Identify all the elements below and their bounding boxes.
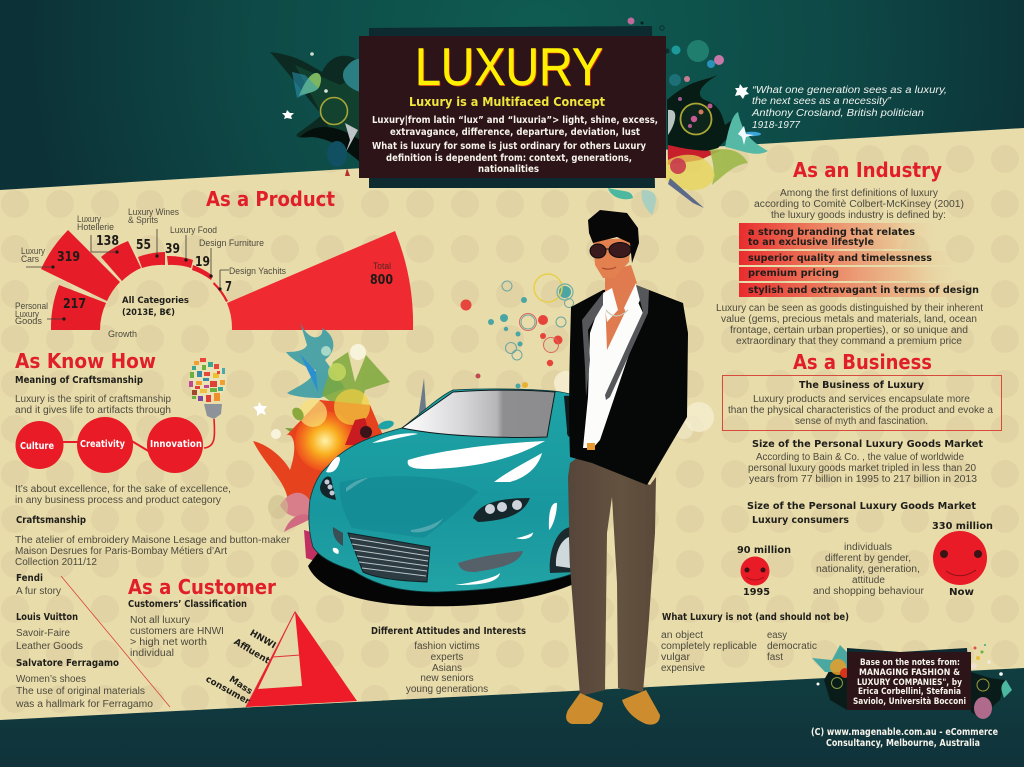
man lapels <box>582 285 649 400</box>
text: excellence <box>15 484 231 506</box>
circle: innovation: Innovation <box>150 439 202 450</box>
car right headlight <box>473 498 530 522</box>
panel: the business of luxury: Luxury products and services encapsulate more <box>753 394 970 405</box>
text: luxury consumers heading: Size of the Personal Luxury Goods Market <box>747 501 976 512</box>
leader lines <box>26 229 229 319</box>
industry description: extraordinary that they command a premium price <box>736 336 962 347</box>
chart values: 55 <box>136 238 151 253</box>
examples: fendi, vuitton, ferragamo: Fendi <box>16 573 43 584</box>
car lower intake <box>458 551 523 572</box>
examples: fendi, vuitton, ferragamo: Salvatore Ferragamo <box>16 658 119 669</box>
text: excellence: in any business process and product category <box>15 495 221 506</box>
subtitle: Luxury is a Multifaced Concept <box>409 95 605 109</box>
header description: extravagance, difference, departure, deviation, lust <box>390 127 640 138</box>
header description: Luxury|from latin “lux” and “luxuria”> light, shine, excess, <box>372 115 658 126</box>
chart labels: Luxury Food <box>170 225 217 235</box>
text: size of market: Size of the Personal Luxury Goods Market <box>752 439 983 450</box>
chart labels: Luxury <box>77 214 101 224</box>
text: different attitudes: new seniors <box>420 673 474 684</box>
car shading <box>340 476 478 538</box>
car left headlight <box>320 476 336 500</box>
industry bars <box>739 223 984 297</box>
text: excellence: It’s about excellence, for the sake of excellence, <box>15 484 231 495</box>
text: different attitudes <box>371 626 526 695</box>
wedge: wines and spirits <box>138 252 165 268</box>
smiley: 1995: 1995 <box>743 587 770 598</box>
industry description: value (gems, precious metals and materials, land, ocean <box>721 314 977 325</box>
man shoes <box>566 690 660 725</box>
circle: innovation <box>147 417 203 473</box>
chart labels: Personal <box>15 301 48 311</box>
know how intro <box>15 394 171 416</box>
decoration: burst right of header <box>608 18 768 215</box>
man hair <box>588 210 639 263</box>
know how intro: and it gives life to artifacts through <box>15 405 171 416</box>
text: individuals: and shopping behaviour <box>813 586 925 597</box>
car grille <box>348 533 430 582</box>
circle: creativity: Creativity <box>80 439 125 450</box>
wedge: total <box>227 231 413 330</box>
text: different attitudes: Asians <box>432 663 462 674</box>
man sunglasses <box>590 242 634 258</box>
subheading: meaning of craftsmanship: Meaning of Craftsmanship <box>15 375 143 386</box>
chart labels <box>15 207 391 339</box>
man belt <box>587 443 595 450</box>
car wheel <box>550 527 578 573</box>
decoration: burst around source box <box>812 644 1012 719</box>
panel: source note: Erica Corbellini, Stefania <box>858 687 961 697</box>
subheading: craftsmanship: Craftsmanship <box>16 515 86 526</box>
decoration: colorful flowers behind car <box>253 322 427 562</box>
wedge: luxury cars <box>41 230 120 301</box>
pyramid: customer classification: HNWI <box>248 628 277 651</box>
chart labels: Luxury <box>21 246 45 256</box>
examples: fendi, vuitton, ferragamo: Women’s shoes <box>16 674 86 685</box>
chart labels: Hotellerie <box>77 222 114 232</box>
man necklace <box>606 310 628 316</box>
text: different attitudes: experts <box>431 652 463 663</box>
examples: fendi, vuitton, ferragamo <box>15 573 153 710</box>
text: different attitudes: young generations <box>406 684 488 695</box>
heading: as an industry: As an Industry <box>793 158 942 182</box>
decoration: burst left of header <box>270 52 362 176</box>
connector lines between circles <box>60 440 150 452</box>
pyramid: customer classification <box>204 611 357 707</box>
panel: source note: Saviolo, Università Bocconi <box>853 697 966 707</box>
chart labels: Total <box>373 261 391 271</box>
quote: 1918-1977 <box>752 120 800 131</box>
text: individuals <box>813 542 925 597</box>
text: individuals: attitude <box>852 575 885 586</box>
quote: “What one generation sees as a luxury, <box>752 85 947 96</box>
text: what luxury is not: easy <box>767 630 787 641</box>
text: luxury consumers heading <box>747 501 976 526</box>
smiley: 1995 <box>737 545 791 598</box>
title: LUXURY <box>415 38 603 97</box>
heading: as a business: As a Business <box>793 350 932 374</box>
quote <box>751 85 947 131</box>
examples: fendi, vuitton, ferragamo: Savoir-Faire <box>16 628 70 639</box>
industry intro: Among the first definitions of luxury <box>780 188 938 199</box>
smiley: now: Now <box>949 587 974 598</box>
chart values: 319 <box>57 250 80 265</box>
examples: fendi, vuitton, ferragamo: was a hallmark for Ferragamo <box>15 699 153 710</box>
chart labels: Luxury <box>15 309 39 319</box>
quote: the next sees as a necessity” <box>752 96 892 107</box>
chart labels: Design Furniture <box>199 238 264 248</box>
man neck and chest <box>605 265 637 350</box>
industry bars: premium pricing <box>748 268 839 279</box>
know how intro: Luxury is the spirit of craftsmanship <box>15 394 171 405</box>
illustration: man in black jacket <box>566 210 688 725</box>
header description: What is luxury for some is just ordinary for others Luxury <box>372 141 646 152</box>
chart labels: & Sprits <box>128 215 158 225</box>
circle: culture <box>16 421 64 469</box>
examples: fendi, vuitton, ferragamo: A fur story <box>16 586 61 597</box>
text: HNWI note: individual <box>130 648 174 659</box>
car highlights <box>326 433 557 585</box>
panel: source note: MANAGING FASHION & <box>859 668 960 678</box>
text: HNWI note <box>130 615 224 659</box>
chart: luxury categories semicircle <box>15 207 413 339</box>
text: atelier: The atelier of embroidery Maisone Lesage and button-maker <box>15 535 291 546</box>
industry description <box>716 303 983 347</box>
text: size of market: According to Bain & Co. , the value of worldwide <box>756 452 964 463</box>
industry description: frontage, certain urban properties), or so unique and <box>730 325 968 336</box>
text: HNWI note: > high net worth <box>130 637 207 648</box>
text: what luxury is not: expensive <box>661 663 705 674</box>
chart values: 800 <box>370 273 393 288</box>
chart values: 138 <box>96 234 119 249</box>
text: HNWI note: customers are HNWI <box>130 626 224 637</box>
industry description: Luxury can be seen as goods distinguished by their inherent <box>716 303 983 314</box>
industry intro: the luxury goods industry is defined by: <box>771 210 946 221</box>
header description <box>372 115 658 175</box>
circle: creativity <box>77 417 133 473</box>
wedge: luxury food <box>167 256 193 268</box>
chart values: 19 <box>195 255 210 270</box>
text: different attitudes: fashion victims <box>414 641 480 652</box>
decoration: bubbles and rings <box>460 274 714 439</box>
industry bars: a strong branding that relates <box>748 227 915 238</box>
text: individuals: individuals <box>844 542 892 553</box>
text: luxury consumers heading: Luxury consumers <box>752 515 849 526</box>
pyramid: customer classification: Mass <box>227 675 254 697</box>
man pants <box>568 452 656 696</box>
chart labels: (2013E, B€) <box>122 308 175 318</box>
wedge: personal luxury goods <box>51 285 106 330</box>
text: what luxury is not: democratic <box>767 641 817 652</box>
chart values: 39 <box>165 242 180 257</box>
background: dark teal top band <box>0 0 1024 210</box>
wedge: design yachts <box>213 282 228 302</box>
chart labels: Goods <box>15 316 42 326</box>
text: what luxury is not: vulgar <box>661 652 691 663</box>
leader dots <box>51 250 222 321</box>
chart labels: Growth <box>108 329 137 339</box>
illustration: sports car <box>308 389 580 606</box>
man jacket <box>569 285 688 485</box>
icon: light bulb with wire <box>189 358 227 448</box>
text: what luxury is not: an object <box>661 630 703 641</box>
panel: source note: LUXURY COMPANIES", by <box>857 678 962 688</box>
subheading: customers classification: Customers’ Classification <box>128 599 247 610</box>
panel: source note: Base on the notes from: <box>860 658 960 668</box>
quote: Anthony Crosland, British politician <box>751 108 924 119</box>
industry bars: superior quality and timelessness <box>748 253 932 264</box>
industry bars: stylish and extravagant in terms of design <box>748 285 979 296</box>
chart values <box>57 234 393 312</box>
industry intro <box>754 188 964 221</box>
examples: fendi, vuitton, ferragamo: Louis Vuitton <box>16 612 78 623</box>
header description: definition is dependent from: context, generations, <box>386 153 632 164</box>
panel: the business of luxury: sense of myth and fascination. <box>795 416 928 427</box>
industry bars: to an exclusive lifestyle <box>748 237 874 248</box>
man face <box>593 238 631 278</box>
credit <box>811 727 998 749</box>
text: size of market: years from 77 billion in 1995 to 217 billion in 2013 <box>749 474 977 485</box>
man shirt <box>583 283 643 448</box>
chart labels: Cars <box>21 254 39 264</box>
panel: the business of luxury: The Business of Luxury <box>799 380 924 391</box>
industry intro: according to Comitè Colbert-McKinsey (2001) <box>754 199 964 210</box>
panel: the business of luxury <box>722 376 1002 430</box>
title: LUXURY <box>416 39 604 98</box>
background: beige dotted central band <box>0 128 1024 720</box>
man collar <box>603 283 640 322</box>
smiley: now <box>932 521 993 598</box>
text: HNWI note: Not all luxury <box>130 615 190 626</box>
text: what luxury is not <box>661 612 849 674</box>
text: atelier: Maison Desrues for Paris-Bombay Métiers d’Art <box>15 546 227 557</box>
panel: source note <box>847 648 971 710</box>
wedge: luxury hotellerie <box>101 241 141 281</box>
chart labels: All Categories <box>122 296 189 306</box>
text: size of market: personal luxury goods market tripled in less than 20 <box>748 463 976 474</box>
circle: culture: Culture <box>20 441 54 452</box>
text: what luxury is not: completely replicable <box>661 641 757 652</box>
credit: Consultancy, Melbourne, Australia <box>826 738 980 749</box>
text: size of market <box>748 439 983 485</box>
text: what luxury is not: fast <box>767 652 783 663</box>
pyramid: customer classification: Affluent <box>232 637 272 667</box>
smiley: now: 330 million <box>932 521 993 532</box>
heading: as know how: As Know How <box>15 349 156 373</box>
car windshield <box>402 390 555 437</box>
text: different attitudes: Different Attitudes and Interests <box>371 626 526 637</box>
wedge: design furniture <box>192 265 213 280</box>
text: atelier: Collection 2011/12 <box>15 557 97 568</box>
text: atelier <box>15 535 291 568</box>
pyramid: customer classification: consumer <box>204 675 252 707</box>
chart values: 217 <box>63 297 86 312</box>
heading: as a product: As a Product <box>206 187 335 211</box>
chart labels: Design Yachits <box>229 266 286 276</box>
text: individuals: nationality, generation, <box>816 564 920 575</box>
chart values: 7 <box>225 280 232 295</box>
background: dark teal bottom band <box>0 660 1024 767</box>
text: what luxury is not: What Luxury is not (and should not be) <box>662 612 849 623</box>
header panel <box>359 26 666 188</box>
examples: fendi, vuitton, ferragamo: The use of original materials <box>16 686 145 697</box>
header description: nationalities <box>478 164 539 175</box>
text: individuals: different by gender, <box>825 553 911 564</box>
chart labels: Luxury Wines <box>128 207 179 217</box>
smiley: 1995: 90 million <box>737 545 791 556</box>
panel: the business of luxury: than the physical characteristics of the product and evoke a <box>728 405 993 416</box>
heading: as a customer: As a Customer <box>128 575 276 599</box>
examples: fendi, vuitton, ferragamo: Leather Goods <box>16 641 83 652</box>
